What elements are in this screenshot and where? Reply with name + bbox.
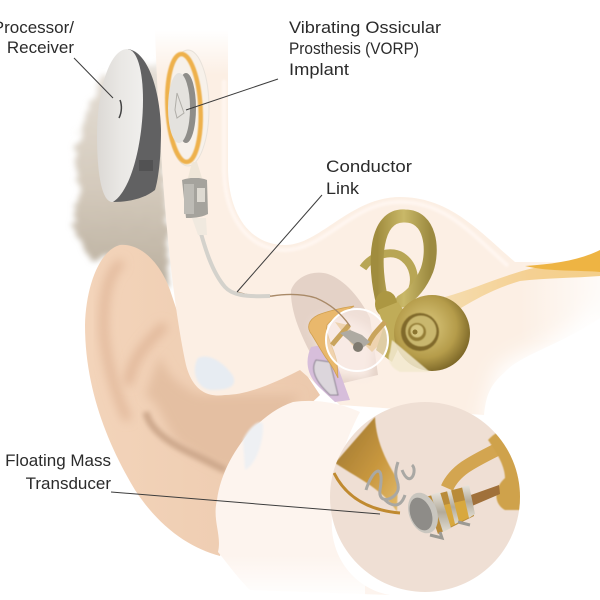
gold winding <box>444 500 470 527</box>
capsule <box>167 50 209 166</box>
auditory nerve <box>445 250 600 312</box>
leader <box>111 492 380 514</box>
VORP implant <box>165 50 209 235</box>
cochlea outer whorl <box>401 313 439 351</box>
ear <box>85 245 320 556</box>
right fade <box>480 300 600 425</box>
circle background <box>330 402 520 592</box>
metal band 1 <box>431 492 451 532</box>
concha dark crease <box>146 412 226 470</box>
cochlea body <box>394 295 470 371</box>
helix inner shadow <box>104 262 128 420</box>
ear outer shape <box>85 245 320 556</box>
label: conductor link <box>237 157 412 292</box>
text: Conductor <box>326 157 412 176</box>
ossicles <box>309 306 385 378</box>
concha shadow <box>145 355 300 470</box>
cavity <box>291 273 378 385</box>
text: Floating Mass <box>5 451 111 470</box>
label: VORP <box>186 18 441 110</box>
gold coil <box>165 53 203 163</box>
top fade <box>145 0 245 75</box>
blue cartilage highlight <box>243 422 263 470</box>
triangle mark <box>175 93 184 118</box>
pale inner ridge <box>224 80 508 266</box>
text line 2: Receiver <box>7 38 74 57</box>
bottom fade <box>215 555 365 600</box>
zoom detail circle <box>330 402 530 592</box>
housing <box>113 49 161 202</box>
clip loops <box>366 462 414 505</box>
dark notch <box>119 100 121 118</box>
lower jaw tissue <box>215 401 390 600</box>
text line 2: Prosthesis (VORP) <box>289 39 419 58</box>
middle ear cavity <box>291 273 378 402</box>
eardrum <box>308 345 350 402</box>
implant wire <box>200 230 270 296</box>
text line 2: Link <box>326 179 360 198</box>
antihelix fold <box>128 325 165 385</box>
conductor link wire <box>237 292 350 326</box>
ampulla <box>375 291 397 317</box>
lower sleeve <box>192 218 207 235</box>
head cross-section <box>145 0 600 425</box>
demodulator <box>182 178 208 218</box>
hair <box>72 60 170 290</box>
wire <box>334 473 400 513</box>
leader <box>74 58 113 98</box>
canal behind <box>363 253 414 290</box>
superior canal <box>377 216 430 305</box>
leader <box>237 195 322 292</box>
jaw shape <box>216 401 390 595</box>
section tissue <box>155 30 600 415</box>
right side fade <box>520 260 600 340</box>
end cap outer <box>408 492 438 534</box>
disc <box>97 49 143 202</box>
transducer body <box>425 486 474 534</box>
text line 2: Transducer <box>26 474 111 493</box>
magnet side <box>176 73 196 143</box>
clip <box>139 160 153 171</box>
upper bone shape <box>335 417 398 512</box>
tiny cap <box>353 342 363 352</box>
right bone <box>488 433 520 511</box>
nerve sheath <box>445 258 600 312</box>
text: Vibrating Ossicular <box>289 18 441 37</box>
vestibule <box>376 302 410 362</box>
label: processor receiver <box>0 18 113 98</box>
rod <box>471 485 500 506</box>
nerve core <box>525 250 600 272</box>
inner ear <box>363 216 470 372</box>
cochlea mid whorl <box>408 323 426 341</box>
incus and stapes <box>335 322 385 352</box>
leader <box>186 79 278 110</box>
eardrum inner <box>314 360 338 395</box>
circle fill <box>326 309 388 371</box>
demodulator label plate <box>184 184 194 214</box>
small detail circle <box>326 309 388 371</box>
lower clip <box>430 522 470 538</box>
metal band 2 <box>462 485 475 518</box>
processor <box>97 49 161 202</box>
blue cartilage patch <box>195 356 234 390</box>
metal band 3 <box>447 490 459 524</box>
bones in circle <box>332 322 385 345</box>
curved ossicle <box>447 448 500 488</box>
label: floating mass transducer <box>5 451 380 514</box>
light wedge <box>389 340 430 372</box>
cavity light <box>312 316 375 380</box>
neck <box>188 162 202 178</box>
tiny transducer <box>340 330 370 350</box>
end cap face <box>410 498 432 530</box>
malleus <box>309 306 354 378</box>
demodulator highlight <box>197 188 205 202</box>
magnet face <box>168 73 190 143</box>
text line 3: Implant <box>289 60 349 79</box>
cochlea apex <box>412 330 418 334</box>
